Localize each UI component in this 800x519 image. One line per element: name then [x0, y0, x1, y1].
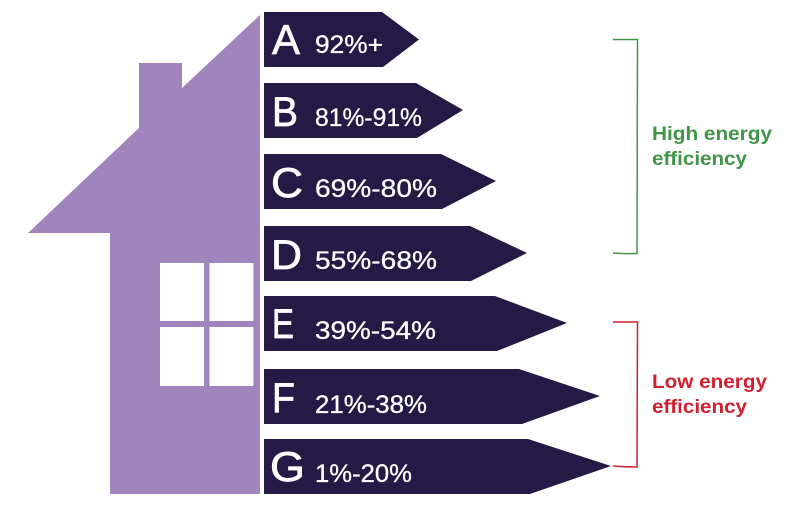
rating arrow D	[264, 226, 527, 281]
rating arrow E: E	[272, 300, 294, 347]
rating arrow E: 39%-54%	[315, 317, 436, 345]
label: low energy efficiency: Low energy	[652, 371, 767, 393]
rating arrow C: C	[271, 159, 303, 206]
label: high energy efficiency: High energy	[652, 123, 772, 145]
rating arrow F	[264, 369, 600, 424]
rating arrow B: 81%-91%	[315, 104, 422, 132]
icon: half house with window	[28, 15, 260, 494]
label: high energy efficiency: efficiency	[652, 148, 747, 170]
rating arrow D: D	[271, 231, 302, 278]
rating arrow F: F	[272, 374, 295, 421]
rating arrow E	[264, 296, 567, 351]
rating arrow C	[264, 154, 496, 209]
rating arrow D: 55%-68%	[315, 247, 437, 275]
rating arrow G	[264, 439, 611, 494]
rating arrow A: A	[272, 16, 300, 63]
label: low energy efficiency: efficiency	[652, 396, 747, 418]
rating arrow C: 69%-80%	[315, 175, 437, 203]
rating arrow F: 21%-38%	[315, 391, 427, 419]
rating arrow G: G	[270, 443, 305, 490]
rating arrow B: B	[272, 88, 298, 135]
rating arrow A	[264, 12, 419, 67]
bracket: high efficiency	[613, 40, 638, 254]
rating arrow B	[264, 83, 463, 138]
bracket: low efficiency	[613, 322, 638, 467]
rating arrow G: 1%-20%	[315, 460, 412, 488]
rating arrow A: 92%+	[315, 31, 383, 59]
